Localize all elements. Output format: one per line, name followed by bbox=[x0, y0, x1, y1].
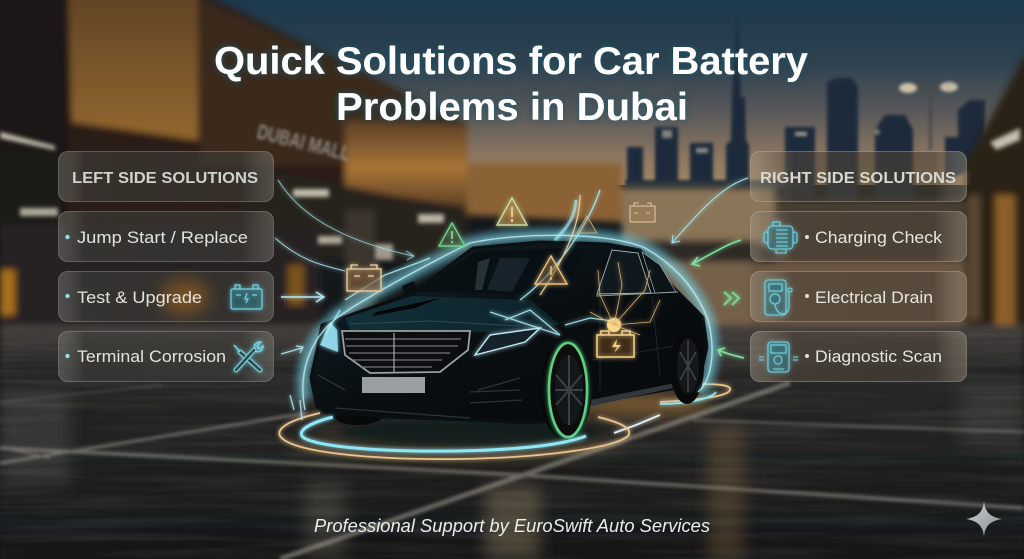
right item: diagnostic scan: Diagnostic Scan bbox=[815, 347, 942, 366]
arrows: left side bbox=[275, 180, 414, 354]
skyline and sky bbox=[200, 0, 1024, 200]
icon: battery bbox=[231, 285, 262, 309]
headlights bbox=[320, 322, 338, 352]
right item: electrical drain: Electrical Drain bbox=[815, 288, 933, 307]
car shadow bbox=[340, 418, 600, 446]
front wheel bbox=[540, 340, 592, 440]
parking lines bbox=[0, 383, 1024, 559]
panel: right side solutions bbox=[750, 152, 966, 382]
left item: terminal corrosion: Terminal Corrosion bbox=[77, 347, 226, 366]
wet floor texture bbox=[0, 330, 1024, 559]
left item: jump start: Jump Start / Replace bbox=[77, 228, 248, 247]
left item: test and upgrade: Test & Upgrade bbox=[77, 288, 202, 307]
car body bbox=[311, 242, 707, 423]
ground glow rings (back) bbox=[614, 384, 730, 433]
battery spark bbox=[590, 262, 660, 335]
icon: warning triangle green bbox=[439, 223, 465, 246]
panel: left side solutions bbox=[58, 152, 274, 382]
icon: floating battery top bbox=[630, 203, 655, 222]
hood bbox=[345, 296, 560, 332]
icon: scanner bbox=[759, 342, 798, 372]
right heading: RIGHT SIDE SOLUTIONS bbox=[760, 170, 956, 187]
icon: floating battery left bbox=[347, 265, 381, 291]
mirror bbox=[402, 281, 418, 296]
rear wheel bbox=[670, 330, 704, 404]
footer credit: Professional Support by EuroSwift Auto Services bbox=[314, 516, 710, 536]
electric glow outline bbox=[303, 235, 712, 410]
license plate bbox=[362, 377, 425, 393]
right item: diagnostic scan bbox=[750, 332, 966, 382]
blurred sign text: DUBAI MALL bbox=[255, 121, 353, 166]
icon: warning triangle top bbox=[497, 198, 527, 225]
icon: sparkle watermark bbox=[966, 501, 1002, 537]
windshield and windows bbox=[418, 248, 586, 296]
blurred ceiling lights bbox=[0, 128, 1020, 260]
car glow shell blur bbox=[304, 235, 712, 400]
left heading: LEFT SIDE SOLUTIONS bbox=[72, 170, 258, 187]
title: Quick Solutions for Car Battery bbox=[214, 40, 808, 83]
left item: jump start bbox=[58, 212, 274, 262]
energy streams bbox=[290, 190, 620, 420]
ground glow rings (front) bbox=[279, 413, 629, 459]
grille bbox=[342, 331, 470, 373]
title bbox=[214, 40, 808, 129]
front-left tyre bbox=[333, 416, 384, 425]
icon: wrench and screwdriver bbox=[234, 342, 263, 370]
central car with energy effects bbox=[279, 190, 730, 459]
right item: charging check bbox=[750, 212, 966, 262]
lower bumper bbox=[318, 375, 522, 418]
right heading bbox=[750, 152, 966, 202]
icon: faint warning triangle bbox=[577, 216, 597, 233]
right item: charging check: Charging Check bbox=[815, 228, 943, 247]
icon: multimeter bbox=[765, 280, 792, 315]
left item: terminal corrosion bbox=[58, 332, 274, 382]
icon: battery on car bbox=[597, 331, 634, 357]
arrows: right side bbox=[672, 178, 748, 358]
door lines and reflections bbox=[592, 296, 680, 390]
icon: alternator bbox=[764, 222, 797, 253]
left heading bbox=[58, 152, 274, 202]
right item: electrical drain bbox=[750, 272, 966, 322]
icon: warning triangle on windshield bbox=[535, 256, 567, 284]
title: Problems in Dubai bbox=[336, 86, 688, 129]
floor reflections bbox=[0, 385, 1024, 559]
left item: test and upgrade bbox=[58, 272, 274, 322]
